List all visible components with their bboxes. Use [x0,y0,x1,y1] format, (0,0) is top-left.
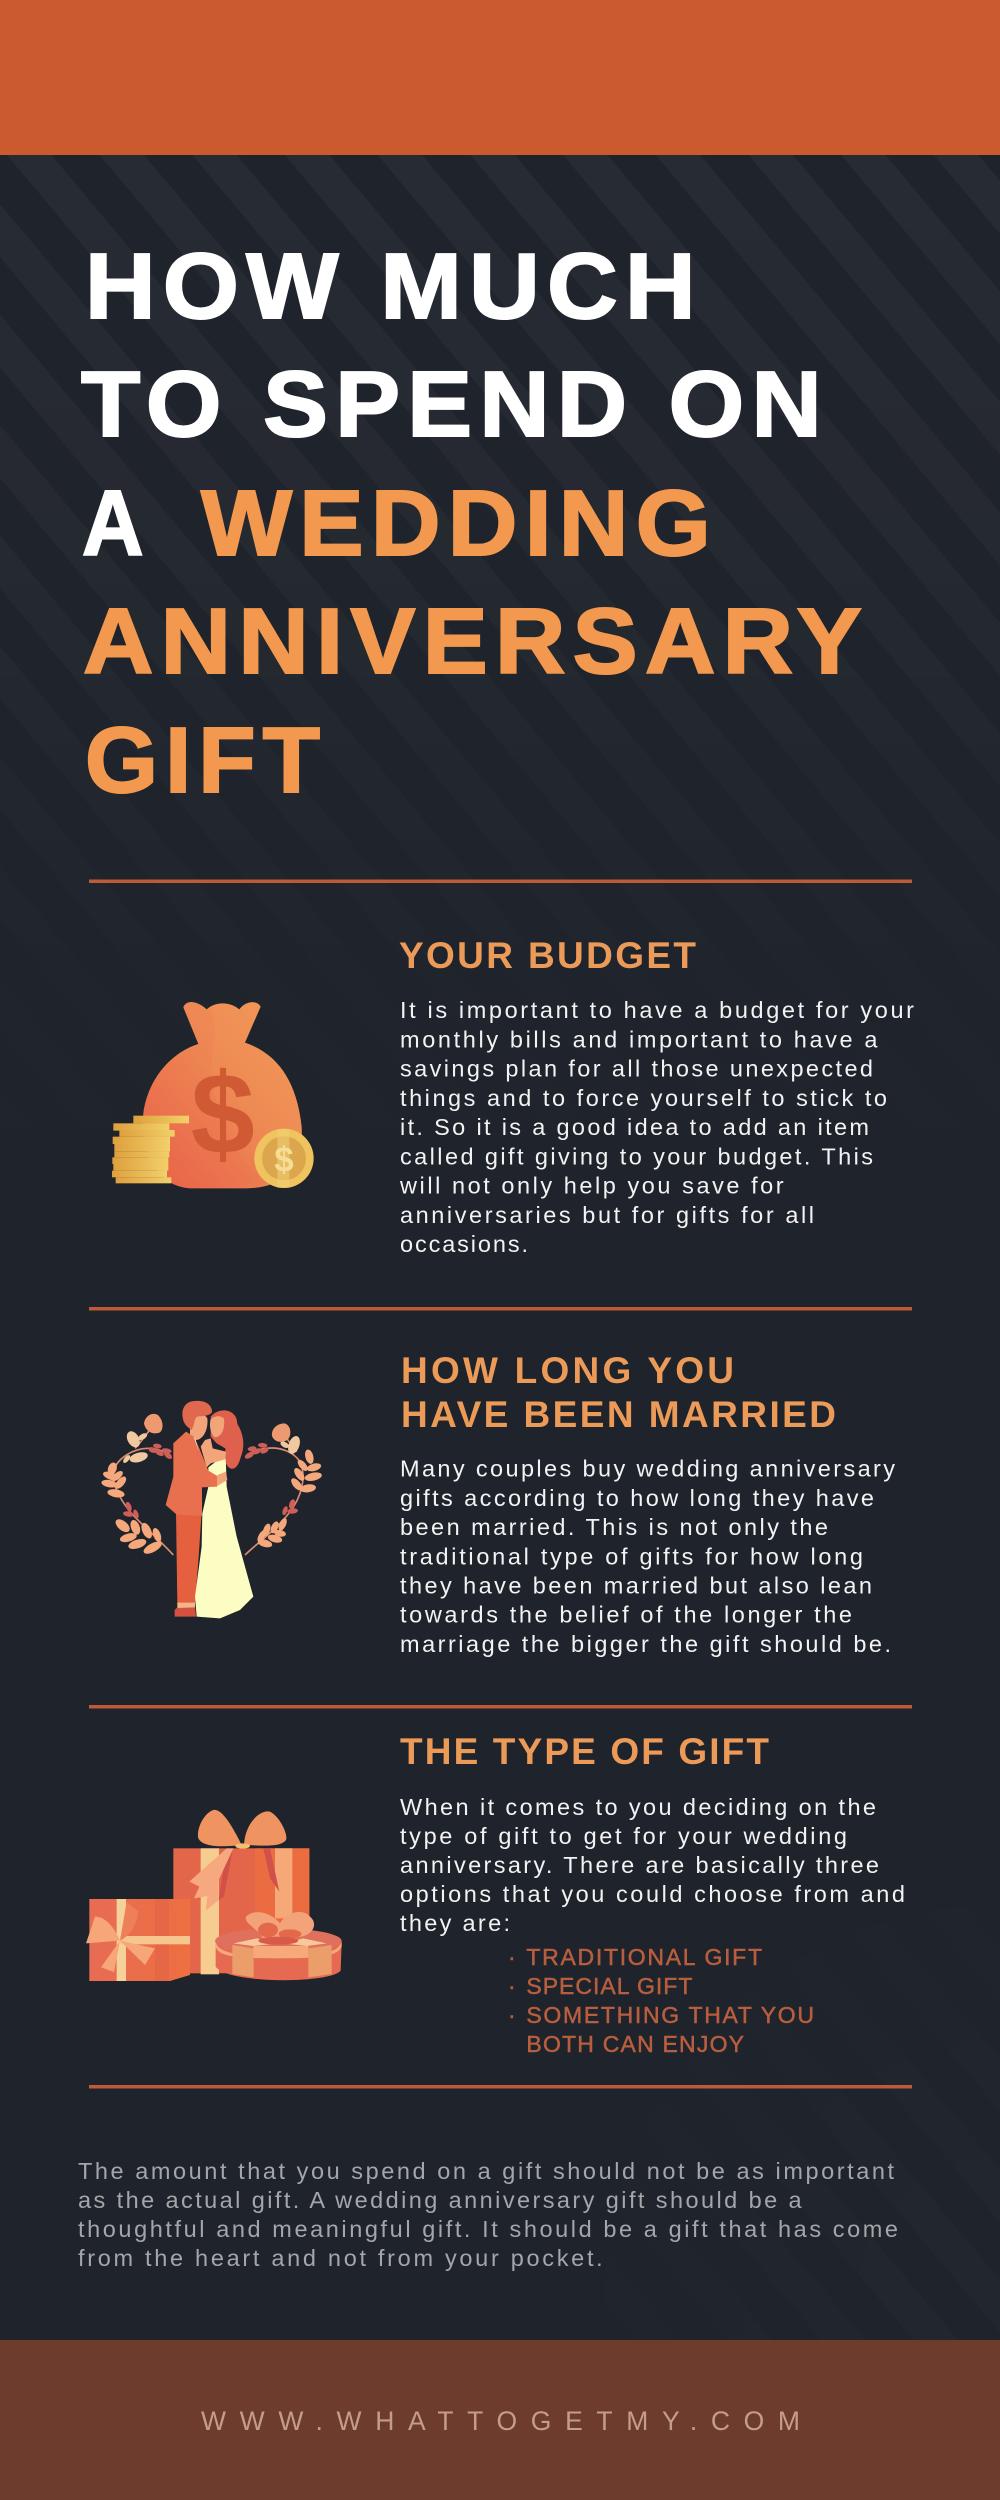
heading: how long you have been married: HAVE BEEN MARRIED [401,1394,836,1435]
list: gift options: TRADITIONAL GIFT [526,1944,762,1970]
text block: your budget [399,997,914,1257]
text block: your budget: anniversaries but for gifts for all [400,1202,814,1228]
left box [89,1899,190,1981]
text block: your budget: will not only help you save for [399,1172,784,1198]
list: gift options: SOMETHING THAT YOU [526,2002,814,2028]
closing paragraph: The amount that you spend on a gift should not be as important [78,2158,894,2184]
panel: the type of gift [86,1731,905,2057]
text block: how long married: towards the belief of the longer the [400,1602,852,1628]
title: TO SPEND ON [81,352,829,456]
title [81,234,869,812]
text block: type of gift: they are: [400,1910,510,1936]
round box [216,1942,342,1980]
jacket [166,1432,217,1516]
text block: how long married: been married. This is not only the [400,1514,828,1540]
text block: how long married: gifts according to how long they have [400,1485,874,1511]
panel: how long you have been married [101,1350,895,1657]
text block: type of gift: options that you could choose from and [400,1881,905,1907]
footer band [0,2340,1000,2500]
text block: your budget: things and to force yourself to stick to [400,1085,887,1111]
icon: money bag with coins [112,1002,314,1188]
top orange band [0,0,1000,155]
title: A [82,471,150,575]
title: GIFT [85,708,327,812]
title: HOW MUCH [85,234,703,338]
text block: how long married: marriage the bigger the gift should be. [400,1631,891,1657]
heading: your budget: YOUR BUDGET [399,935,696,976]
text block: your budget: monthly bills and important to have a [400,1026,878,1052]
text block: how long married: traditional type of gifts for how long [400,1543,863,1569]
heading: the type of gift: THE TYPE OF GIFT [400,1731,769,1772]
woman hair [211,1410,243,1469]
text block: type of gift: anniversary. There are basically three [400,1852,879,1878]
list: gift options: · [508,1973,516,1999]
text block: how long married: Many couples buy wedding anniversary [400,1456,895,1482]
man's face [190,1415,208,1440]
man's hair [182,1401,212,1430]
roses [144,1414,290,1442]
text block: your budget: savings plan for all those unexpected [400,1056,873,1082]
closing paragraph: from the heart and not from your pocket. [78,2245,603,2271]
heading: how long you have been married [401,1350,836,1435]
text block: your budget: occasions. [400,1231,528,1257]
list: gift options: BOTH CAN ENJOY [526,2031,744,2057]
text block: type of gift: type of gift to get for your wedding [400,1823,847,1849]
text block: your budget: called gift giving to your budget. This [400,1143,873,1169]
woman's arm [201,1438,226,1467]
title: WEDDING [201,471,718,575]
list: gift options [508,1944,814,2057]
closing paragraph: as the actual gift. A wedding anniversary gift should be a [78,2187,803,2213]
closing paragraph [78,2158,898,2271]
text block: type of gift: When it comes to you deciding on the [400,1794,876,1820]
woman face [210,1416,224,1437]
text block: how long married: they have been married but also lean [400,1572,872,1598]
heading: how long you have been married: HOW LONG YOU [401,1350,734,1391]
man's legs and shoes [176,1512,202,1604]
footer website url: WWW.WHATTOGETMY.COM [201,2406,800,2436]
text block: how long married [400,1456,895,1657]
closing paragraph: thoughtful and meaningful gift. It should be a gift that has come [78,2216,898,2242]
list: gift options: · [508,2002,516,2028]
icon: gift boxes [86,1810,342,1981]
text block: your budget: it. So it is a good idea to add an item [400,1114,869,1140]
dress [195,1454,253,1618]
list: gift options: · [508,1944,516,1970]
icon: couple with floral heart [101,1401,323,1618]
text block: your budget: It is important to have a budget for your [400,997,914,1023]
title: ANNIVERSARY [83,589,869,693]
text block: type of gift [400,1794,905,1936]
icon: money bag with coins: $ [191,1050,255,1178]
list: gift options: SPECIAL GIFT [526,1973,692,1999]
icon: money bag with coins: $ [274,1141,294,1180]
panel: your budget [112,935,914,1257]
